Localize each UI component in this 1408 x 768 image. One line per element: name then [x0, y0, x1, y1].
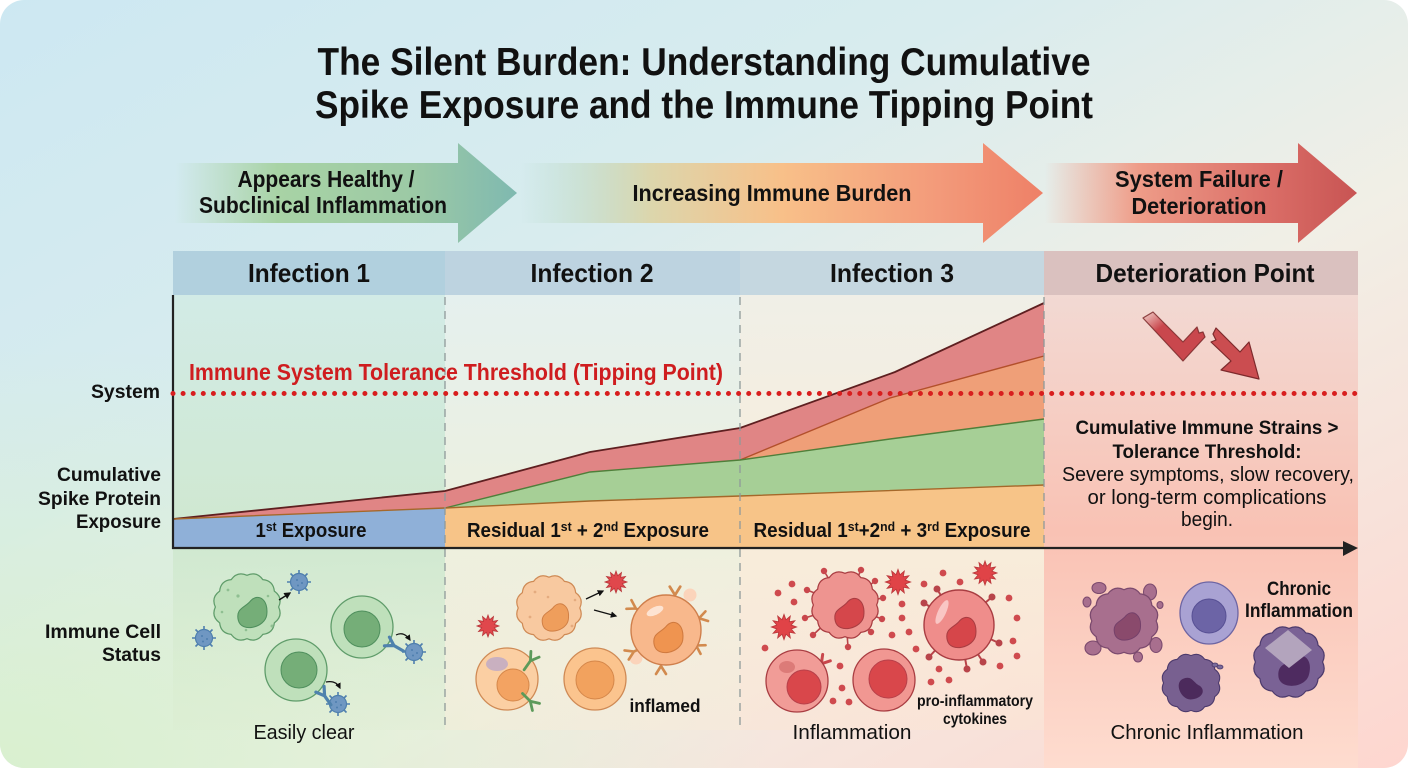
y axis labels: System: [91, 381, 160, 403]
area chart: cumulative spike protein exposure: Exposure: [618, 520, 709, 542]
arrow: system failure stage: Deterioration: [1132, 193, 1266, 219]
area chart: cumulative spike protein exposure: Exposure: [277, 520, 366, 542]
callout: tolerance exceeded: [1062, 417, 1354, 531]
area chart: cumulative spike protein exposure: [173, 303, 1044, 548]
callout: tolerance exceeded: Severe symptoms, slow recovery,: [1062, 464, 1354, 486]
chart axes: [172, 295, 1358, 556]
column headers: Infection 1: [248, 258, 370, 288]
label: pro-inflammatory cytokines: cytokines: [943, 711, 1007, 728]
area chart: cumulative spike protein exposure: st: [848, 519, 859, 534]
arrow: system failure stage: System Failure /: [1115, 166, 1284, 192]
icons: orange stressed immune cells: [476, 571, 708, 710]
arrow: increasing immune burden stage: [520, 143, 1043, 243]
area chart: cumulative spike protein exposure: 1: [256, 520, 267, 542]
label: chronic inflammation on icons: [1245, 579, 1353, 622]
column headers: Infection 3: [830, 258, 954, 288]
column dividers: [445, 297, 1044, 725]
column backgrounds: [173, 295, 1358, 768]
y axis labels: Exposure: [76, 511, 161, 533]
area chart: cumulative spike protein exposure: nd: [880, 519, 895, 534]
label: chronic inflammation: Chronic Inflammation: [1110, 722, 1304, 744]
y axis labels: [38, 381, 161, 533]
y axis labels: Spike Protein: [38, 488, 161, 510]
arrow: appears healthy stage: Appears Healthy /: [238, 166, 415, 192]
area chart: cumulative spike protein exposure: rd: [927, 519, 939, 534]
arrow: appears healthy stage: Subclinical Inflammation: [199, 192, 447, 218]
label: pro-inflammatory cytokines: pro-inflammatory: [917, 693, 1033, 710]
area chart: cumulative spike protein exposure: Residual 1: [754, 520, 854, 542]
arrow: appears healthy stage: [175, 143, 517, 243]
arrow: increasing immune burden stage: Increasing Immune Burden: [632, 180, 912, 206]
icons: exhausted purple immune cells: [1083, 582, 1324, 712]
row label: immune cell status: Immune Cell: [45, 621, 161, 643]
arrow: system failure stage: [1045, 143, 1357, 243]
label: pro-inflammatory cytokines: [917, 693, 1033, 728]
area chart: cumulative spike protein exposure: Residual 1: [467, 520, 567, 542]
area chart: cumulative spike protein exposure: + 2: [572, 520, 603, 542]
label: easily clear: Easily clear: [254, 722, 355, 744]
column headers: [173, 251, 1358, 295]
column headers: Deterioration Point: [1096, 258, 1315, 288]
area chart: cumulative spike protein exposure: + 3: [895, 520, 927, 542]
area chart: cumulative spike protein exposure: st: [266, 519, 277, 534]
title: Spike Exposure and the Immune Tipping Point: [315, 84, 1093, 127]
icons: healthy green immune cells: [192, 570, 426, 716]
icon: broken deterioration arrow: [1143, 312, 1259, 379]
callout: tolerance exceeded: Tolerance Threshold:: [1112, 441, 1302, 463]
callout: tolerance exceeded: or long-term complications: [1088, 487, 1326, 509]
row label: immune cell status: Status: [102, 644, 161, 666]
callout: tolerance exceeded: Cumulative Immune Strains >: [1076, 417, 1338, 439]
label: chronic inflammation on icons: Inflammation: [1245, 601, 1353, 622]
area chart: cumulative spike protein exposure: +2: [859, 520, 880, 542]
icons: red inflamed immune cells: [762, 561, 1020, 712]
y axis labels: Cumulative: [57, 464, 161, 486]
label: chronic inflammation on icons: Chronic: [1267, 579, 1331, 600]
area chart: cumulative spike protein exposure: st: [561, 519, 572, 534]
row label: immune cell status: [45, 621, 161, 666]
title: [315, 41, 1093, 127]
label: inflammation: Inflammation: [792, 722, 912, 744]
column headers: Infection 2: [530, 258, 654, 288]
area chart: cumulative spike protein exposure: Exposure: [939, 520, 1030, 542]
threshold line: Immune System Tolerance Threshold (Tipping Point): [189, 359, 723, 385]
callout: tolerance exceeded: begin.: [1181, 509, 1233, 531]
label: inflamed: inflamed: [630, 695, 700, 716]
title: The Silent Burden: Understanding Cumulative: [318, 41, 1090, 84]
area chart: cumulative spike protein exposure: nd: [603, 519, 618, 534]
